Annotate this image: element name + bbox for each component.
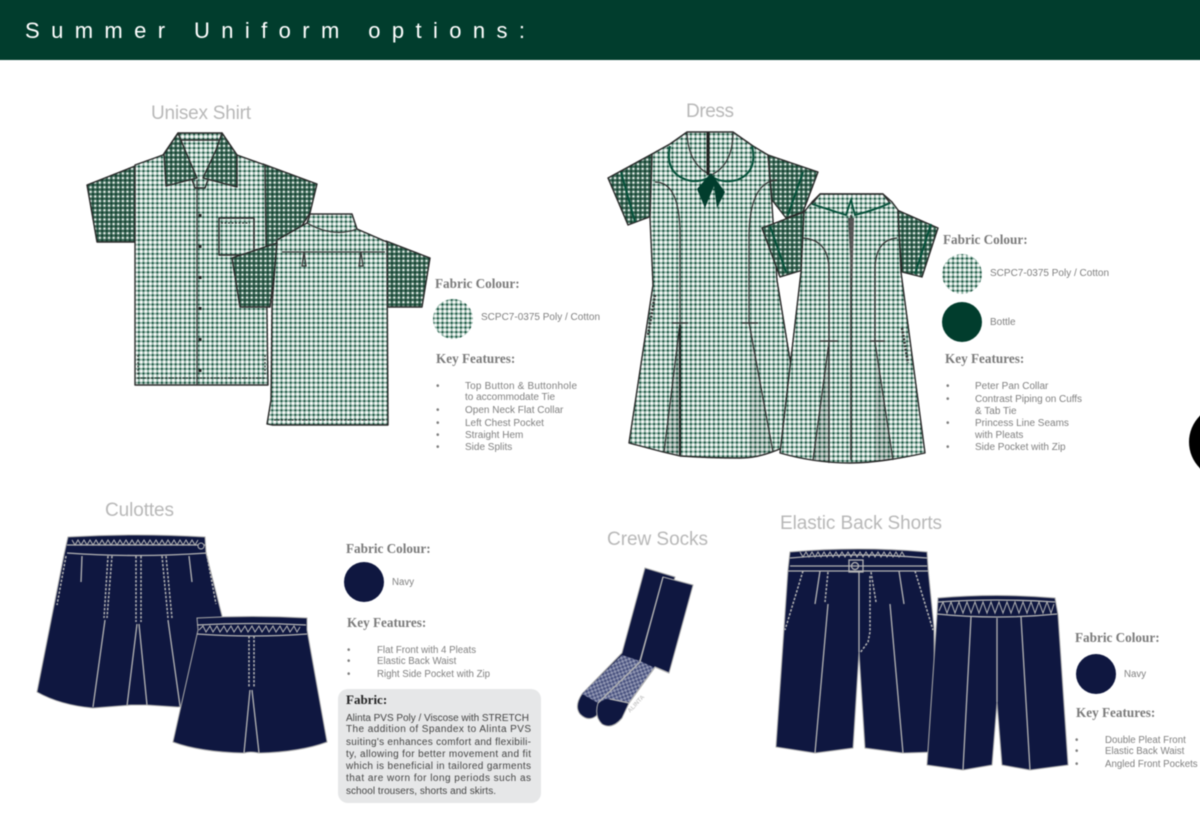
feature list (946, 381, 1082, 453)
feature list: • (946, 394, 950, 405)
panel: culottes (37, 500, 327, 753)
feature list: • (436, 405, 440, 416)
decorative black circle at right edge (1189, 405, 1200, 479)
swatch name: Navy (1124, 669, 1146, 680)
feature list: • (946, 442, 950, 453)
header banner (0, 0, 1200, 60)
fabric colour label: Fabric Colour: (943, 232, 1028, 247)
feature list: Right Side Pocket with Zip (377, 669, 490, 680)
feature list: Double Pleat Front (1105, 735, 1186, 746)
feature list (347, 645, 490, 680)
panel: elastic back shorts (776, 513, 1068, 770)
socks illustration: ALINTA (627, 694, 647, 714)
heading: unisex shirt: Unisex Shirt (151, 103, 252, 124)
feature list: • (1075, 759, 1079, 770)
fabric note box (338, 689, 541, 803)
fabric note text: which is beneficial in tailored garments (345, 761, 531, 772)
panel: shirt fabric details (433, 276, 600, 453)
swatch name: SCPC7-0375 Poly / Cotton (481, 312, 600, 323)
feature list: to accommodate Tie (465, 392, 555, 403)
feature list (436, 381, 577, 453)
feature list: • (436, 430, 440, 441)
key features label: Key Features: (945, 351, 1024, 366)
shirt front illustration (87, 133, 317, 385)
fabric colour label: Fabric Colour: (435, 276, 520, 291)
heading: culottes: Culottes (105, 500, 174, 521)
swatch: bottle (942, 302, 982, 342)
culottes back illustration (173, 616, 327, 753)
swatch: navy (1076, 654, 1116, 694)
feature list: • (1075, 746, 1079, 757)
swatch name: SCPC7-0375 Poly / Cotton (990, 268, 1109, 279)
swatch: gingham (942, 254, 982, 294)
feature list: Princess Line Seams (975, 418, 1069, 429)
fabric note text: school trousers, shorts and skirts. (346, 786, 496, 797)
title: Summer Uniform options: (25, 18, 525, 43)
socks illustration (577, 568, 693, 726)
fabric note text: ty, allowing for better movement and fit (346, 749, 531, 760)
fabric colour label: Fabric Colour: (1075, 630, 1160, 645)
panel: dress (608, 101, 938, 463)
heading: dress: Dress (686, 101, 734, 122)
shirt back illustration (232, 214, 430, 425)
feature list: Straight Hem (465, 430, 523, 441)
feature list: Side Pocket with Zip (975, 442, 1066, 453)
panel: unisex shirt (87, 103, 430, 425)
feature list: with Pleats (974, 430, 1023, 441)
panel: shorts details (1075, 630, 1198, 770)
panel: culottes details (338, 541, 541, 803)
swatch: navy (344, 562, 384, 602)
feature list: • (436, 418, 440, 429)
key features label: Key Features: (436, 351, 515, 366)
swatch name: Navy (392, 577, 414, 588)
fabric note text: suiting's enhances comfort and flexibili- (346, 737, 531, 748)
swatch name: Bottle (990, 317, 1016, 328)
fabric note text: that are worn for long periods such as (346, 773, 531, 784)
swatch: gingham (433, 299, 473, 339)
fabric note text (345, 713, 531, 797)
feature list: Peter Pan Collar (975, 381, 1049, 392)
feature list: Side Splits (465, 442, 512, 453)
feature list: Angled Front Pockets (1105, 759, 1198, 770)
feature list: Contrast Piping on Cuffs (975, 394, 1082, 405)
feature list: • (946, 418, 950, 429)
heading: crew socks: Crew Socks (607, 529, 708, 550)
dress front illustration (608, 132, 818, 458)
fabric note heading: Fabric: (346, 692, 387, 707)
feature list: • (347, 645, 351, 656)
feature list: Elastic Back Waist (1105, 746, 1185, 757)
panel: crew socks (577, 529, 708, 726)
shorts front illustration (776, 549, 935, 753)
feature list: Left Chest Pocket (465, 418, 544, 429)
key features label: Key Features: (1076, 705, 1155, 720)
feature list: • (1075, 735, 1079, 746)
panel: dress fabric details (942, 232, 1109, 453)
feature list: Open Neck Flat Collar (465, 405, 564, 416)
feature list: • (946, 381, 950, 392)
feature list: • (436, 442, 440, 453)
feature list: Flat Front with 4 Pleats (377, 645, 476, 656)
key features label: Key Features: (347, 615, 426, 630)
shorts back illustration (927, 596, 1068, 770)
feature list: • (436, 381, 440, 392)
feature list (1075, 735, 1198, 770)
heading: elastic back shorts: Elastic Back Shorts (780, 513, 942, 534)
feature list: • (347, 669, 351, 680)
feature list: Top Button & Buttonhole (465, 381, 577, 392)
feature list: & Tab Tie (975, 406, 1017, 417)
dress back illustration (762, 194, 938, 463)
culottes front illustration (37, 535, 222, 708)
feature list: • (347, 656, 351, 667)
feature list: Elastic Back Waist (377, 656, 457, 667)
fabric note text: Alinta PVS Poly / Viscose with STRETCH (346, 713, 529, 724)
fabric colour label: Fabric Colour: (346, 541, 431, 556)
fabric note text: The addition of Spandex to Alinta PVS (346, 724, 531, 735)
